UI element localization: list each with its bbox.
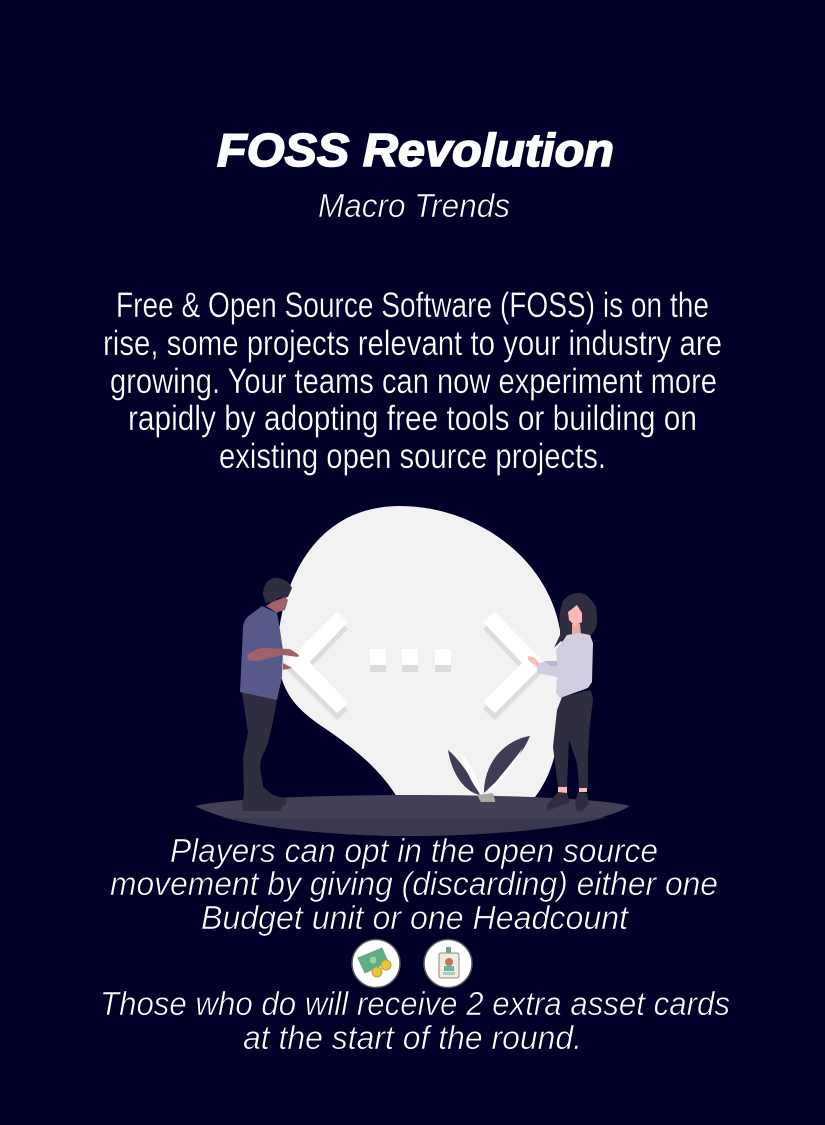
plant [448, 736, 530, 802]
background blob [278, 506, 562, 797]
rules text: movement by giving (discarding) either one [110, 865, 718, 902]
title: FOSS Revolution [217, 124, 614, 176]
intro text block: rise, some projects relevant to your industry are [103, 324, 722, 363]
reward text [100, 985, 730, 1056]
subtitle: Macro Trends [318, 187, 510, 224]
rules text: Budget unit or one Headcount [201, 899, 630, 936]
reward text: at the start of the round. [243, 1019, 582, 1056]
intro text block: growing. Your teams can now experiment more [110, 362, 717, 401]
man [240, 578, 299, 811]
ground ellipse [195, 795, 630, 836]
icon: headcount badge [424, 940, 472, 988]
right chevron [483, 612, 545, 720]
intro text block: rapidly by adopting free tools or building on [128, 399, 697, 438]
woman [528, 593, 597, 812]
rules text: Players can opt in the open source [170, 832, 658, 869]
reward text: Those who do will receive 2 extra asset cards [100, 985, 730, 1022]
rules text [110, 832, 718, 936]
intro text block [103, 286, 722, 476]
illustration: two people building code [195, 506, 630, 836]
left chevron [286, 612, 348, 720]
code dots [370, 649, 451, 672]
icon: budget money [352, 940, 400, 988]
intro text block: existing open source projects. [219, 437, 606, 476]
